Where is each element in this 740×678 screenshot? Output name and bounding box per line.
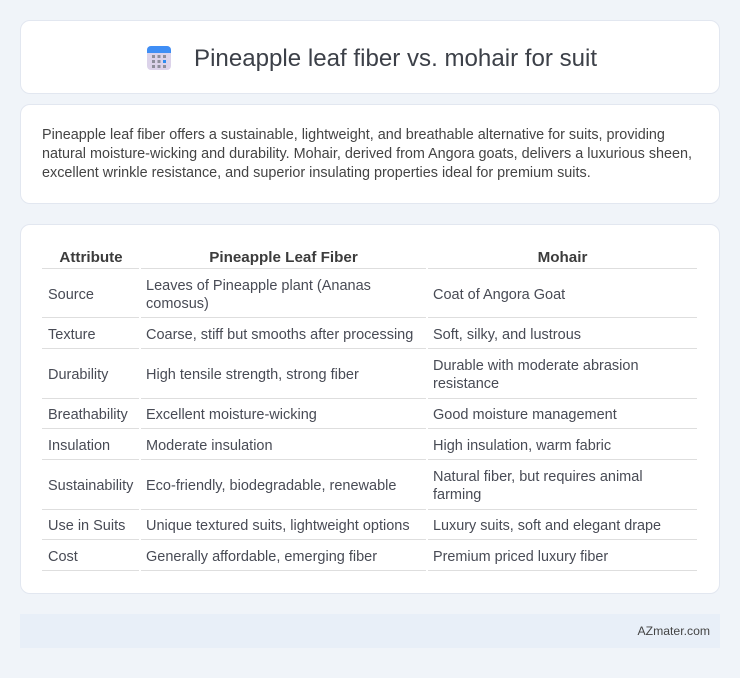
row: texture: Texture <box>48 327 96 343</box>
summary text: natural moisture-wicking and durability. Mohair, derived from Angora goats, delivers a luxurious sheen, <box>42 146 692 162</box>
row: durability: Durable with moderate abrasion <box>433 358 639 374</box>
row: durability: resistance <box>433 376 499 392</box>
row: insulation: Insulation <box>48 438 110 454</box>
summary text <box>42 126 692 181</box>
row: source: comosus) <box>146 296 209 312</box>
row: cost <box>48 549 608 565</box>
row: sustainability <box>48 469 643 503</box>
icon: calendar <box>147 46 171 70</box>
header row: Pineapple Leaf Fiber <box>209 249 358 266</box>
title: Pineapple leaf fiber vs. mohair for suit <box>194 45 597 72</box>
row: use in suits <box>48 518 661 534</box>
row: breathability: Breathability <box>48 407 128 423</box>
row: durability: High tensile strength, strong fiber <box>146 367 359 383</box>
summary card <box>20 104 720 204</box>
row: sustainability: Eco-friendly, biodegradable, renewable <box>146 478 396 494</box>
row: use in suits: Unique textured suits, lightweight options <box>146 518 410 534</box>
row: texture: Soft, silky, and lustrous <box>433 327 581 343</box>
row: insulation: Moderate insulation <box>146 438 273 454</box>
row: texture <box>48 327 581 343</box>
row: source: Leaves of Pineapple plant (Ananas <box>146 278 371 294</box>
row: use in suits: Use in Suits <box>48 518 125 534</box>
table card <box>20 224 720 594</box>
row: breathability <box>48 407 617 423</box>
footer text: AZmater.com <box>638 624 710 638</box>
row: source: Coat of Angora Goat <box>433 287 565 303</box>
row: source: Source <box>48 287 94 303</box>
row: cost: Generally affordable, emerging fiber <box>146 549 377 565</box>
row: cost: Premium priced luxury fiber <box>433 549 608 565</box>
row: use in suits: Luxury suits, soft and elegant drape <box>433 518 661 534</box>
summary text: excellent wrinkle resistance, and superior insulating properties ideal for premium suits. <box>42 165 591 181</box>
summary text: Pineapple leaf fiber offers a sustainable, lightweight, and breathable alternative for suits, providing <box>42 126 665 142</box>
row: insulation <box>48 438 611 454</box>
row: sustainability: Sustainability <box>48 478 133 494</box>
footer bar <box>20 614 720 648</box>
header row <box>59 249 588 266</box>
row: durability: Durability <box>48 367 108 383</box>
header row: Mohair <box>538 249 587 266</box>
row: texture: Coarse, stiff but smooths after processing <box>146 327 413 343</box>
row: breathability: Excellent moisture-wicking <box>146 407 317 423</box>
row: durability <box>48 358 639 392</box>
title card <box>20 20 720 94</box>
row: sustainability: Natural fiber, but requires animal <box>433 469 643 485</box>
row: insulation: High insulation, warm fabric <box>433 438 611 454</box>
row: sustainability: farming <box>433 487 481 503</box>
header row: Attribute <box>59 249 123 266</box>
row: cost: Cost <box>48 549 78 565</box>
row: source <box>48 278 566 312</box>
row: breathability: Good moisture management <box>433 407 617 423</box>
